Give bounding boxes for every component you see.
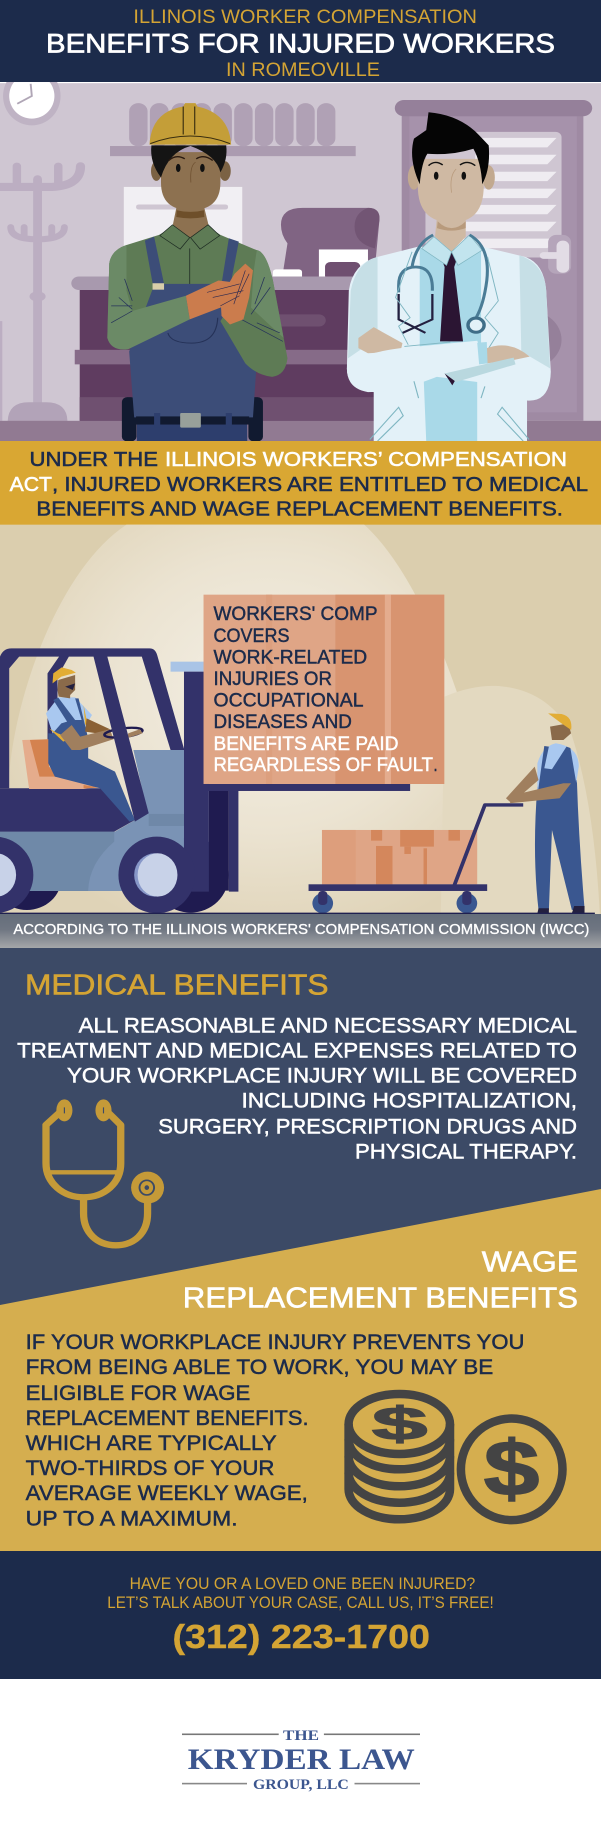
worker arms [107,245,190,350]
logo: The Kryder Law Group: GROUP, LLC [253,1777,349,1793]
cab rear post behind driver [48,655,70,742]
doctor folded arms [358,327,402,353]
wage body text: UP TO A MAXIMUM. [26,1508,238,1531]
logo: The Kryder Law Group: KRYDER LAW [188,1743,415,1776]
wage body text: AVERAGE WEEKLY WAGE, [26,1482,308,1505]
reception desk [71,208,380,421]
background hill [441,686,600,915]
door with window [395,100,592,421]
wage body text: REPLACEMENT BENEFITS. [26,1407,309,1430]
worker collar and neck [172,206,209,238]
source banner [0,914,601,948]
wage heading: WAGE [482,1247,578,1279]
statement text: , INJURED WORKERS ARE ENTITLED TO MEDICAL [52,473,588,496]
medical body text [17,1015,577,1164]
worker torso shirt [107,225,273,338]
cart with boxes [309,805,523,913]
header location: IN ROMEOVILLE [226,59,380,81]
doctor hair [412,112,489,184]
box text: workers comp coverage: DISEASES AND [214,712,352,733]
wage body text: FROM BEING ABLE TO WORK, YOU MAY BE [26,1356,493,1379]
call to action text: LET’S TALK ABOUT YOUR CASE, CALL US, IT’S FREE! [107,1594,494,1612]
statement text: BENEFITS AND WAGE REPLACEMENT BENEFITS. [36,498,563,520]
wage body text: WHICH ARE TYPICALLY [26,1432,277,1455]
doctor coat [347,247,551,441]
statement text: ACT [10,473,52,496]
icon: coins: $ [372,1397,428,1449]
doctor shirt and tie [420,248,481,441]
medical body text: INCLUDING HOSPITALIZATION, [242,1090,577,1113]
doctor neck and head [435,216,466,252]
background dome [8,525,502,915]
call to action text: HAVE YOU OR A LOVED ONE BEEN INJURED? [130,1575,475,1593]
header panel [0,0,601,82]
doctor coat pockets [370,381,529,441]
call to action text [107,1575,494,1612]
worker head [151,161,162,181]
worker gloves [186,281,245,319]
box text: workers comp coverage: WORKERS' COMP [214,604,378,625]
wage body text [26,1331,524,1531]
box text: workers comp coverage: . [434,755,438,776]
large box panel [204,595,444,784]
icon: stethoscope [46,1099,164,1245]
forklift wheels [118,837,195,913]
statement text [10,448,588,520]
wage body text: ELIGIBLE FOR WAGE [26,1382,250,1405]
floor [0,421,601,441]
wage body text: TWO-THIRDS OF YOUR [26,1457,274,1480]
medical heading: MEDICAL BENEFITS [25,969,328,1001]
wage heading [183,1247,578,1314]
panel: wage replacement benefits [0,1189,601,1552]
medical body text: ALL REASONABLE AND NECESSARY MEDICAL [79,1015,577,1038]
worker hard hat [149,103,231,145]
box text: workers comp coverage: COVERS [214,626,290,647]
box text: workers comp coverage: BENEFITS ARE PAID [214,734,398,755]
worker overalls [129,237,256,417]
medical body text: YOUR WORKPLACE INJURY WILL BE COVERED [67,1065,577,1088]
icon: coins: $ [484,1424,539,1512]
box text: workers comp coverage: INJURIES OR [214,669,332,690]
statement text: UNDER THE [30,448,158,471]
box text: workers comp coverage: OCCUPATIONAL [214,690,364,711]
box text: workers comp coverage: REGARDLESS OF FAULT [214,755,433,776]
wage heading: REPLACEMENT BENEFITS [183,1282,578,1314]
coat rack [0,166,80,421]
worker pushing cart [506,713,585,913]
illustration: warehouse forklift scene [0,525,601,915]
shelf with binders [110,103,356,156]
illustration: doctor [347,112,551,441]
illustration: construction worker [107,103,287,441]
header kicker: ILLINOIS WORKER COMPENSATION [133,7,477,28]
forklift cab frame [0,648,184,822]
doctor coat lapels [396,252,498,348]
forklift driver [22,667,143,822]
forklift [0,648,410,913]
gold statement band [0,441,601,525]
medical body text: PHYSICAL THERAPY. [355,1141,577,1164]
medical body text: SURGERY, PRESCRIPTION DRUGS AND [158,1115,577,1138]
doctor stethoscope [399,235,487,333]
statement text: ILLINOIS WORKERS’ COMPENSATION [165,448,567,471]
source banner: ACCORDING TO THE ILLINOIS WORKERS' COMPENSATION COMMISSION (IWCC) [13,921,589,938]
main title: BENEFITS FOR INJURED WORKERS [46,28,555,58]
illustration: worker and doctor in office [0,67,601,441]
icon: wall clock [3,67,61,125]
icon: coins [349,1394,562,1520]
call to action panel [0,1551,601,1679]
medical body text: TREATMENT AND MEDICAL EXPENSES RELATED TO [17,1040,577,1063]
logo: The Kryder Law Group [182,1728,420,1793]
logo: The Kryder Law Group: THE [283,1728,319,1744]
phone number: (312) 223-1700 [172,1619,430,1656]
box text: workers comp coverage: WORK-RELATED [214,647,367,668]
box text: workers comp coverage [214,604,438,776]
panel: medical benefits [0,948,601,1308]
wage body text: IF YOUR WORKPLACE INJURY PREVENTS YOU [26,1331,524,1354]
wall paper behind worker [124,187,242,271]
